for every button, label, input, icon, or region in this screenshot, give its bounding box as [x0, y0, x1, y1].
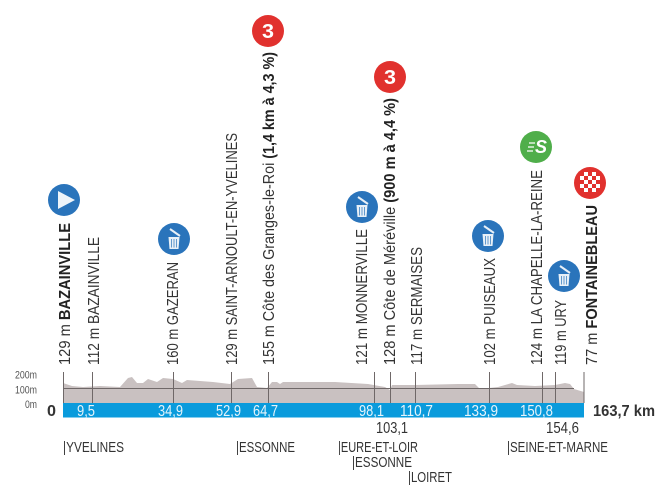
vertical place labels: 121 m MONNERVILLE — [354, 229, 371, 365]
department labels: |ESSONNE — [352, 455, 412, 471]
icon: waste zone Puiseaux — [472, 220, 504, 252]
distance labels on band: 52,9 — [216, 403, 241, 420]
total distance: 163,7 km — [593, 403, 655, 420]
icon: finish — [574, 167, 606, 199]
icon: waste zone Monnerville — [346, 191, 378, 223]
icon: category 3 climb Granges-le-Roi: 3 — [262, 21, 274, 43]
department labels: |LOIRET — [408, 470, 452, 486]
distance labels below band: 154,6 — [546, 420, 579, 437]
distance labels on band: 9,5 — [77, 403, 95, 420]
icon: category 3 climb Granges-le-Roi — [252, 15, 284, 47]
distance labels below band — [376, 420, 579, 437]
icon: waste zone Gazeran — [158, 223, 190, 255]
icon: waste zone Ury — [548, 260, 580, 292]
icon: sprint: S — [535, 137, 547, 157]
vertical place labels: 102 m PUISEAUX — [482, 257, 499, 365]
vertical place labels — [57, 52, 601, 365]
altitude axis labels: 0m — [25, 399, 37, 411]
distance labels on band — [77, 403, 553, 420]
altitude axis labels: 100m — [15, 384, 37, 396]
altitude axis labels: 200m — [15, 370, 37, 382]
distance labels on band: 133,9 — [464, 403, 498, 420]
vertical place labels: 119 m URY — [553, 300, 570, 365]
distance labels on band: 98,1 — [359, 403, 384, 420]
distance labels below band: 103,1 — [376, 420, 408, 437]
vertical place labels: 160 m GAZERAN — [165, 262, 182, 365]
vertical place labels: 155 m Côte des Granges-le-Roi (1,4 km à 4,3 %) — [261, 52, 278, 365]
department labels: |YVELINES — [63, 440, 124, 456]
distance labels on band: 64,7 — [253, 403, 278, 420]
distance marker lines — [64, 372, 584, 403]
vertical place labels: 129 m BAZAINVILLE — [57, 223, 74, 365]
vertical place labels: 124 m LA CHAPELLE-LA-REINE — [529, 170, 546, 365]
vertical place labels: 129 m SAINT-ARNOULT-EN-YVELINES — [224, 133, 241, 365]
icon: category 3 climb Méréville — [374, 61, 406, 93]
vertical place labels: 112 m BAZAINVILLE — [86, 237, 103, 365]
vertical place labels: 128 m Côte de Méréville (900 m à 4,4 %) — [382, 98, 399, 365]
icon: category 3 climb Méréville: 3 — [384, 67, 396, 89]
start distance: 0 — [47, 403, 56, 420]
distance labels on band: 34,9 — [158, 403, 183, 420]
department labels: |EURE-ET-LOIR — [338, 440, 418, 456]
terrain silhouette — [63, 377, 584, 403]
department labels — [63, 440, 608, 486]
department labels: |SEINE-ET-MARNE — [507, 440, 608, 456]
elevation profile chart — [15, 370, 655, 437]
icon: sprint — [520, 131, 552, 163]
distance labels on band: 150,8 — [520, 403, 553, 420]
icon: start — [48, 184, 80, 216]
department labels: |ESSONNE — [236, 440, 295, 456]
100 m reference line — [63, 388, 574, 390]
vertical place labels: 77 m FONTAINEBLEAU — [584, 205, 601, 365]
vertical place labels: 117 m SERMAISES — [409, 247, 426, 365]
blue distance band — [63, 403, 584, 418]
distance labels on band: 110,7 — [400, 403, 433, 420]
altitude axis labels — [15, 370, 37, 411]
